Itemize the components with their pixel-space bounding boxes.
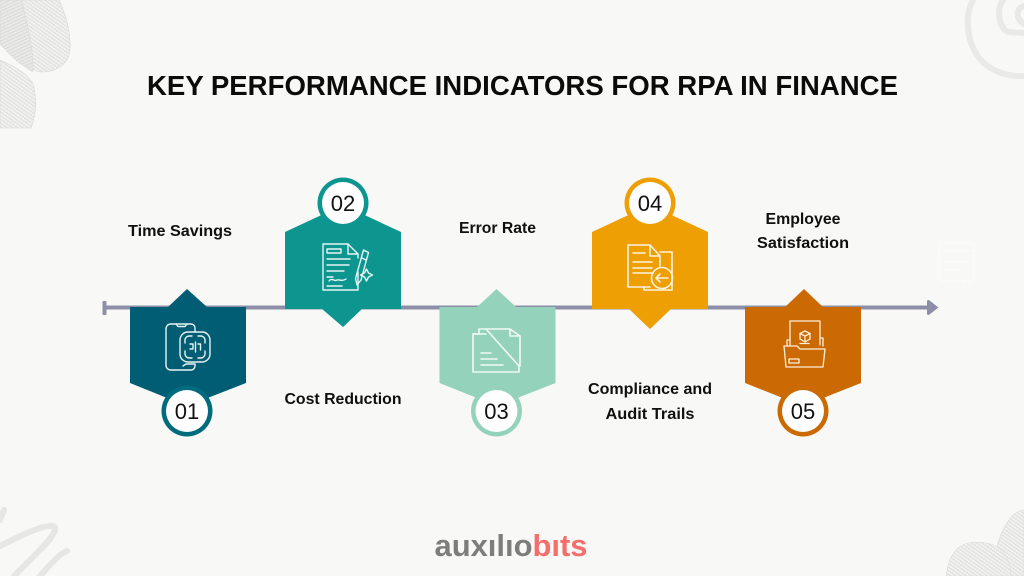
- label: Compliance and Audit Trails: Compliance and: [588, 381, 712, 398]
- decoration: scribble bottom left: [0, 510, 67, 576]
- label: Error Rate: Error Rate: [459, 220, 536, 237]
- icon: documents with back arrow: [628, 245, 672, 290]
- decoration: mesh shape top left: [0, 0, 70, 128]
- step 02: Cost Reduction: [284, 178, 402, 408]
- decoration: spiral top right: [968, 0, 1024, 76]
- number circle 02: 02: [331, 191, 355, 216]
- icon: phone with face scan: [166, 324, 210, 370]
- label: Cost Reduction: Cost Reduction: [284, 391, 402, 408]
- panel: step 04 badge: [592, 205, 708, 329]
- logo: auxiliobits: auxılıobıts: [434, 528, 588, 563]
- step 03: Error Rate: [440, 220, 556, 436]
- title: KEY PERFORMANCE INDICATORS FOR RPA IN FINANCE: [147, 70, 898, 101]
- number circle 03: 03: [484, 399, 509, 424]
- number circle 03: [471, 386, 522, 436]
- step 05: Employee Satisfaction: [745, 211, 861, 436]
- timeline arrow: [102, 300, 938, 315]
- number circle 01: [162, 386, 212, 436]
- number circle 05: [778, 386, 828, 436]
- faint ghost icon right of the timeline: [939, 243, 974, 287]
- number circle 01: 01: [175, 399, 199, 424]
- step 04: Compliance and Audit Trails: [588, 178, 712, 423]
- label: Time Savings: Time Savings: [128, 223, 232, 240]
- number circle 05: 05: [791, 399, 815, 424]
- panel: step 02 badge: [285, 205, 401, 327]
- panel: step 01 badge: [130, 289, 246, 406]
- decoration: mesh shape bottom right: [946, 510, 1024, 576]
- panel: step 03 badge: [440, 289, 556, 406]
- panel: step 05 badge: [745, 289, 861, 406]
- label: Compliance and Audit Trails: Audit Trails: [606, 406, 695, 423]
- step 01: Time Savings: [128, 223, 246, 436]
- number circle 04: 04: [638, 191, 662, 216]
- number circle 04: [624, 178, 676, 228]
- label: Employee Satisfaction: Satisfaction: [757, 235, 849, 252]
- label: Employee Satisfaction: Employee: [766, 211, 841, 228]
- icon: folder with package document: [784, 321, 825, 367]
- number circle 02: [318, 178, 368, 228]
- icon: document with pen: [323, 244, 372, 290]
- icon: crossed out documents: [473, 329, 520, 372]
